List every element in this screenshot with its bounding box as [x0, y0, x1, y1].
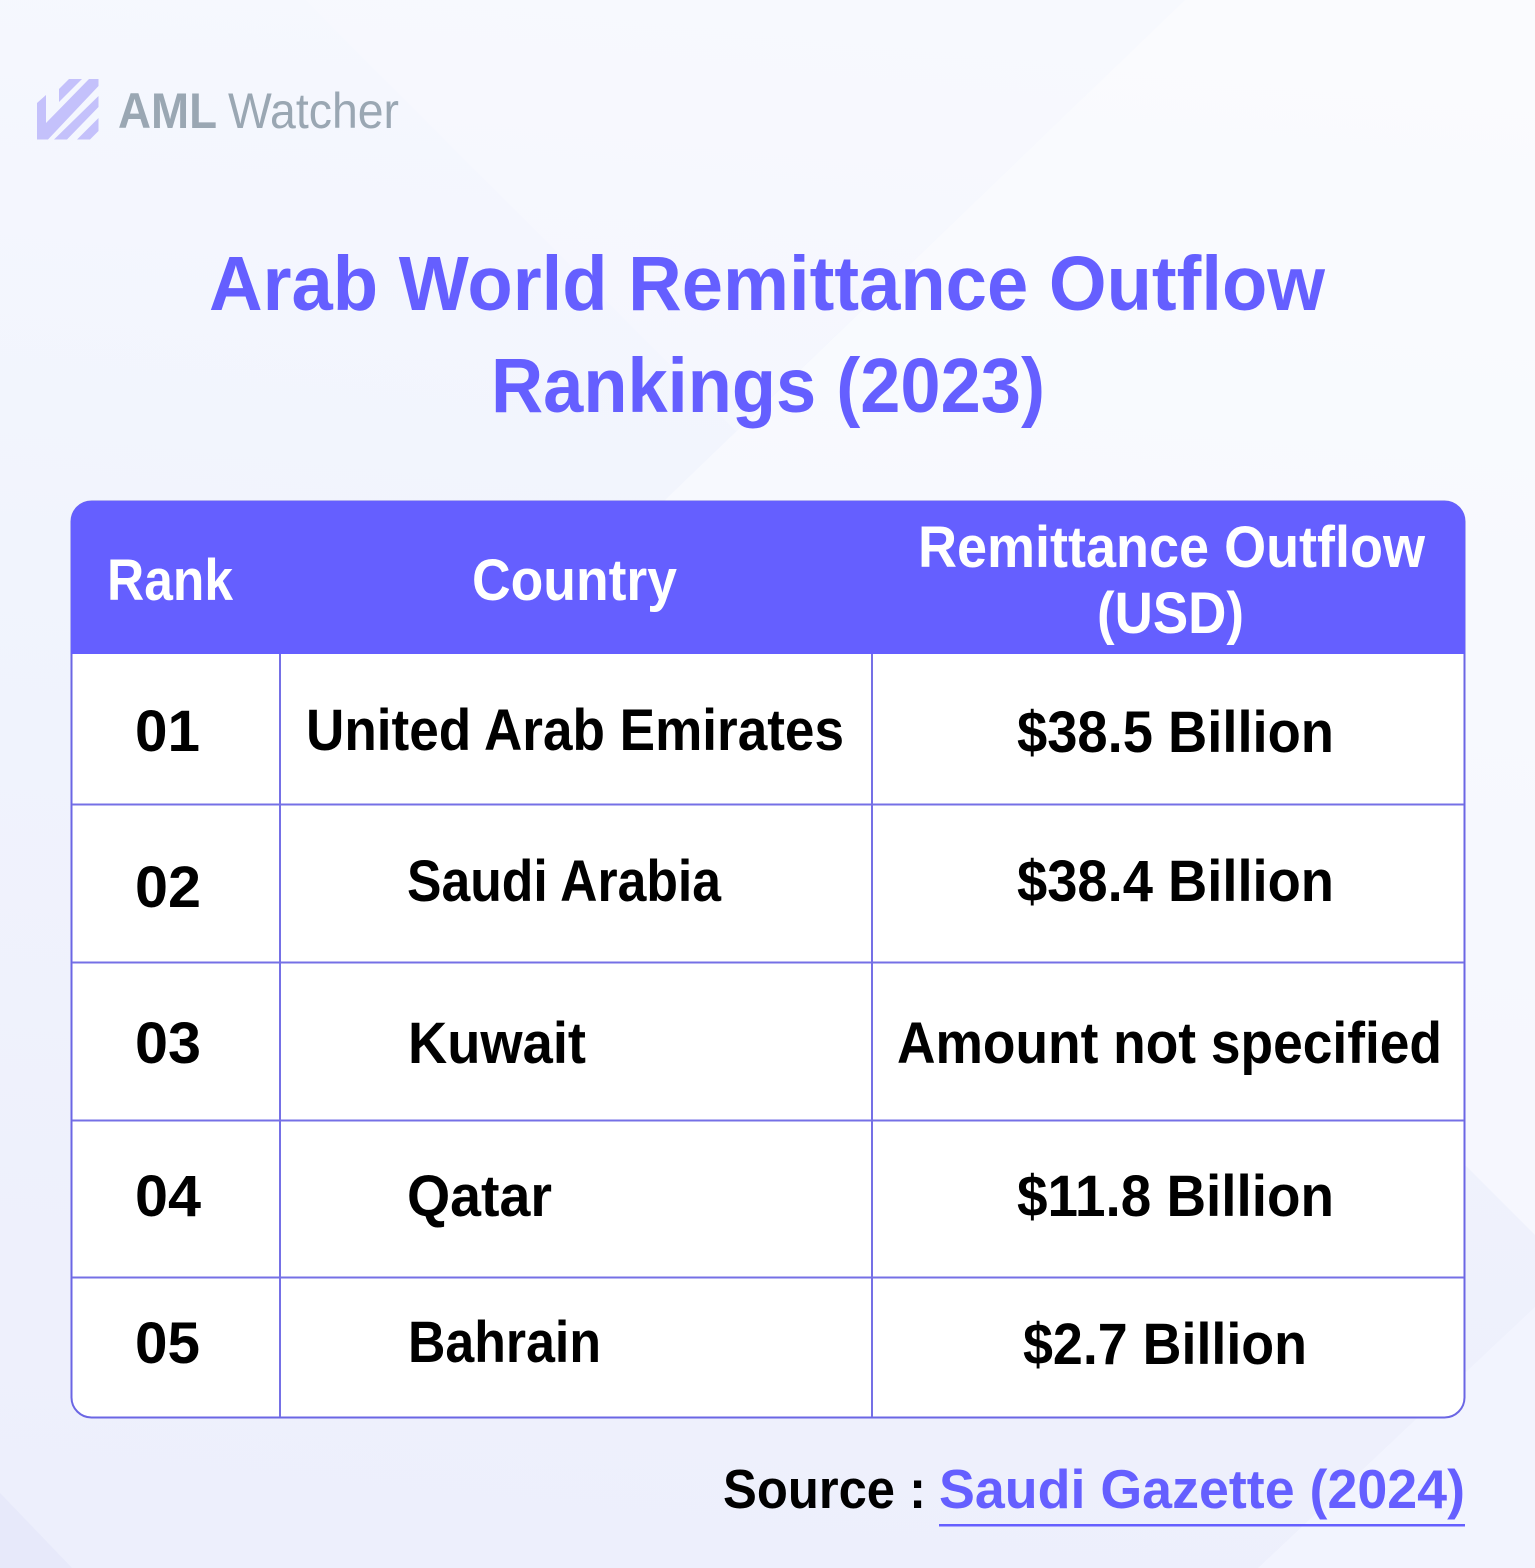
row 05 [135, 1310, 1307, 1377]
row 01: United Arab Emirates [306, 698, 844, 763]
table header band: (USD) [1097, 581, 1244, 646]
row 05: $2.7 Billion [1023, 1312, 1307, 1377]
row 03: 03 [135, 1011, 201, 1076]
title [209, 241, 1326, 429]
row 01 [135, 698, 1334, 765]
row 02: 02 [135, 855, 201, 920]
table body [72, 502, 1464, 1418]
row 02: $38.4 Billion [1017, 849, 1334, 914]
row 02: Saudi Arabia [407, 849, 722, 914]
title: Rankings (2023) [491, 343, 1045, 429]
row 03: Amount not specified [897, 1011, 1442, 1076]
table header band: Country [472, 548, 677, 613]
source: Saudi Gazette (2024) [939, 1458, 1465, 1520]
row 05: 05 [135, 1311, 200, 1376]
row 04 [135, 1164, 1334, 1229]
table header band [71, 501, 1465, 654]
logo wordmark: Watcher [228, 83, 399, 139]
row 03 [135, 1011, 1442, 1076]
table [71, 501, 1465, 1418]
row 02 [135, 849, 1334, 920]
row 04: $11.8 Billion [1017, 1164, 1334, 1229]
logo wordmark: AML [118, 83, 217, 139]
table header band: Remittance Outflow [918, 515, 1426, 580]
logo: AML Watcher [37, 79, 399, 140]
row 05: Bahrain [408, 1310, 601, 1375]
row 04: 04 [135, 1164, 201, 1229]
source: Source : [723, 1458, 926, 1520]
table header band: Rank [107, 548, 234, 613]
title: Arab World Remittance Outflow [209, 241, 1326, 327]
logo wordmark [118, 83, 399, 139]
row 03: Kuwait [408, 1011, 586, 1076]
row 01: $38.5 Billion [1017, 700, 1334, 765]
row 04: Qatar [407, 1164, 552, 1229]
source [723, 1458, 1465, 1526]
icon: striped check mark [37, 79, 98, 140]
row 01: 01 [135, 699, 200, 764]
